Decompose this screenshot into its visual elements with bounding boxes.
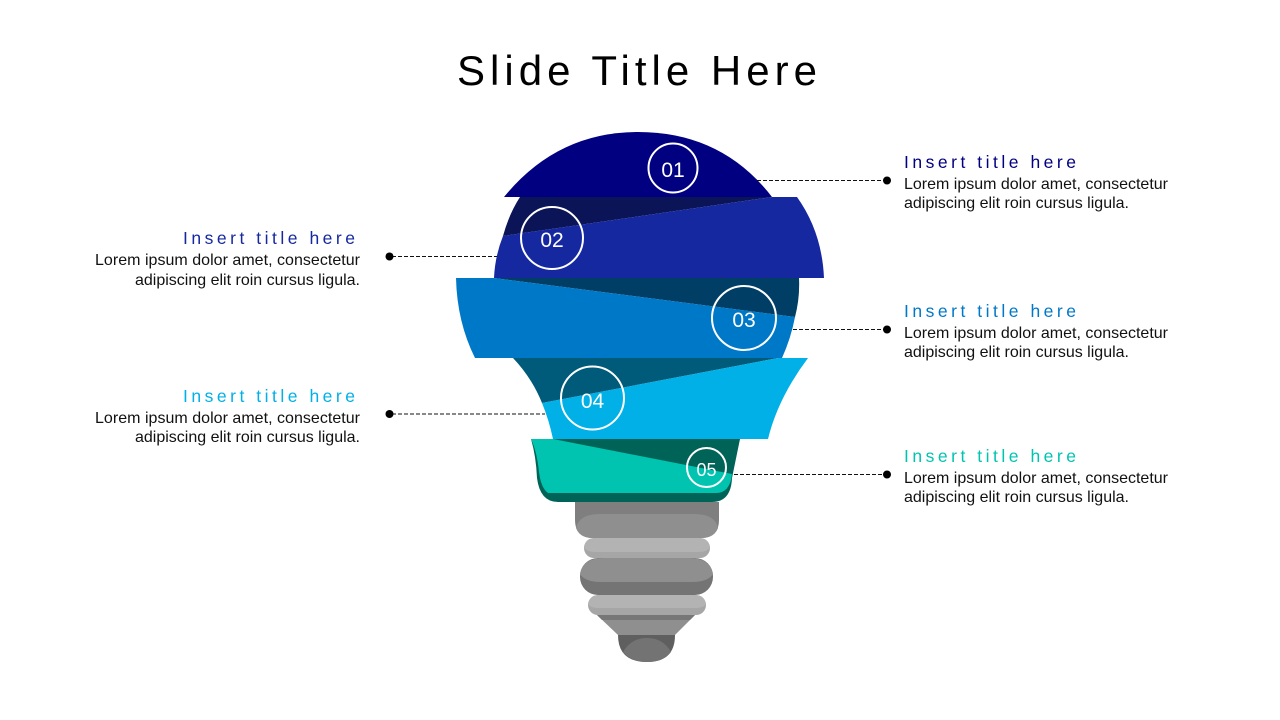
text block 03: adipiscing elit roin cursus ligula. — [904, 344, 1129, 361]
text block 05 — [904, 446, 1169, 506]
marker 03: 03 — [732, 309, 756, 332]
connector 05 — [734, 470, 891, 478]
text block 01 — [904, 152, 1169, 212]
connector 04 — [386, 410, 545, 418]
connector 01 — [757, 176, 891, 184]
text block 04: adipiscing elit roin cursus ligula. — [135, 429, 360, 446]
marker 04 — [561, 366, 624, 430]
marker 04: 04 — [581, 390, 604, 413]
text block 01: adipiscing elit roin cursus ligula. — [904, 195, 1129, 212]
text block 02 — [95, 228, 361, 289]
text block 04 — [95, 386, 361, 446]
marker 05 — [687, 448, 726, 487]
connector 02 — [386, 252, 497, 260]
marker 05: 05 — [696, 460, 717, 480]
text block 02: adipiscing elit roin cursus ligula. — [135, 272, 360, 289]
text block 04: Lorem ipsum dolor amet, consectetur — [95, 410, 361, 427]
band 1 — [504, 132, 772, 197]
band 5 — [531, 439, 740, 502]
text block 05: adipiscing elit roin cursus ligula. — [904, 489, 1129, 506]
bulb base — [575, 502, 719, 662]
text block 03: Insert title here — [904, 301, 1076, 321]
marker 02 — [521, 207, 583, 269]
text block 05: Insert title here — [904, 446, 1076, 466]
text block 01: Insert title here — [904, 152, 1076, 172]
text block 05: Lorem ipsum dolor amet, consectetur — [904, 470, 1169, 487]
marker 01 — [648, 144, 698, 192]
marker 01: 01 — [661, 159, 685, 182]
band 4 — [513, 358, 808, 439]
text block 02: Insert title here — [183, 228, 355, 248]
text block 01: Lorem ipsum dolor amet, consectetur — [904, 176, 1169, 193]
marker 03 — [712, 286, 776, 350]
marker 02: 02 — [540, 229, 564, 252]
band 2 — [494, 197, 824, 278]
title: Slide Title Here — [457, 47, 817, 94]
text block 03: Lorem ipsum dolor amet, consectetur — [904, 325, 1169, 342]
text block 03 — [904, 301, 1169, 361]
connector 03 — [793, 326, 891, 334]
text block 04: Insert title here — [183, 386, 355, 406]
band 3 — [456, 278, 799, 358]
lightbulb graphic — [456, 132, 824, 662]
text block 02: Lorem ipsum dolor amet, consectetur — [95, 252, 361, 269]
